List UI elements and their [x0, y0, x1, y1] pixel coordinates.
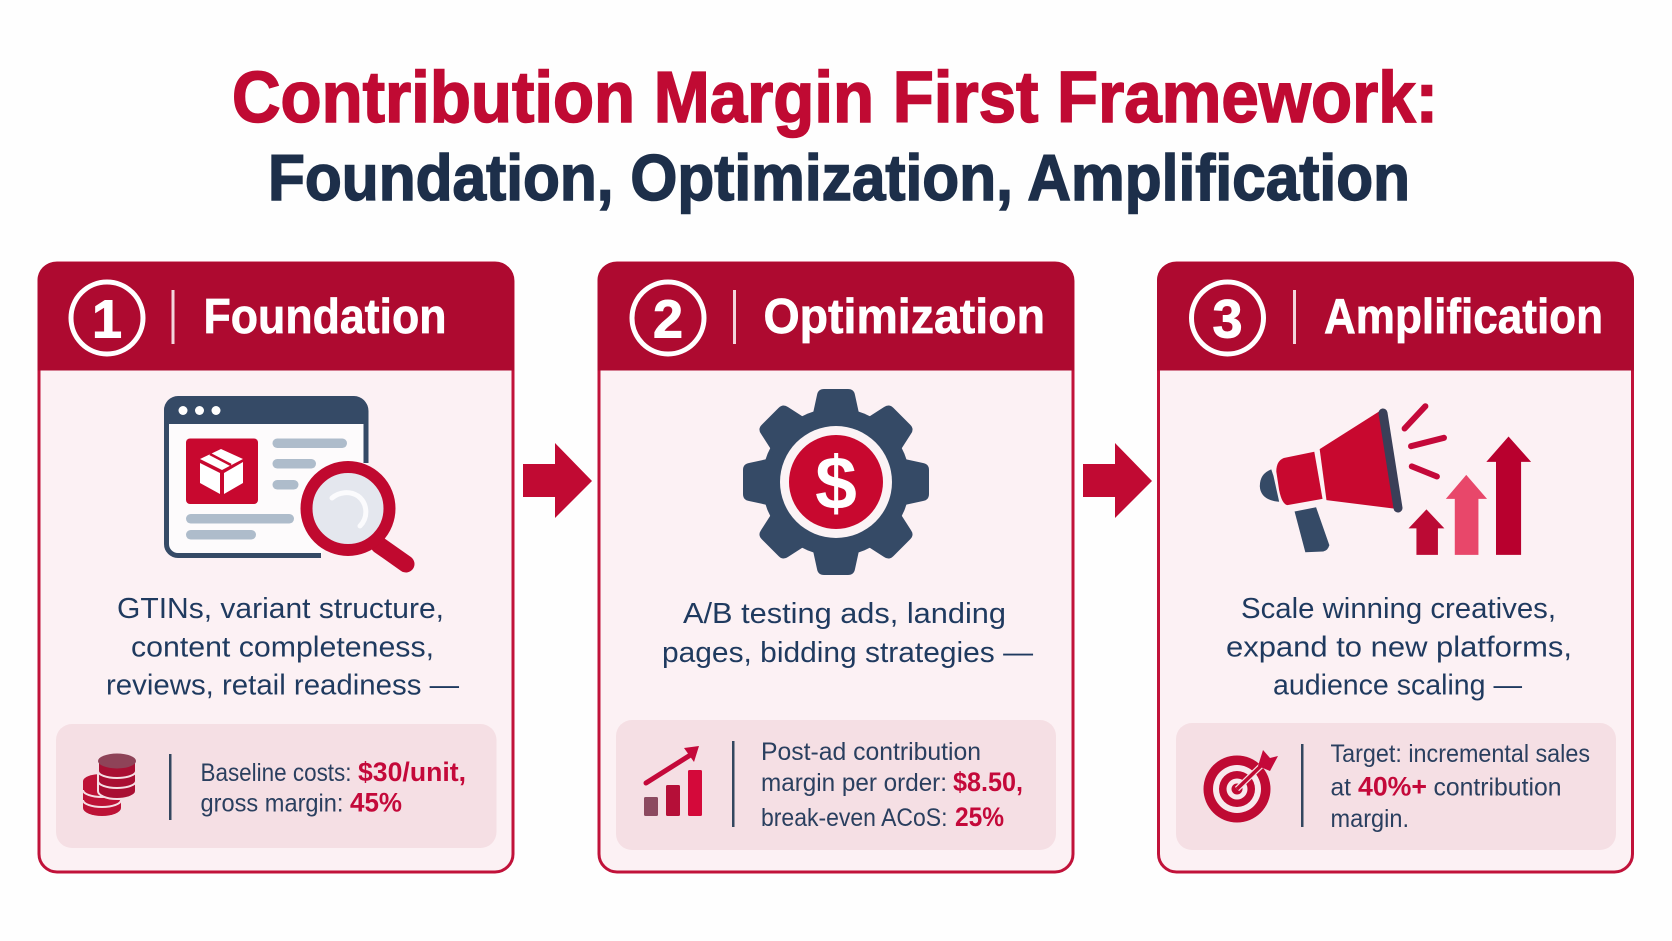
- description text: [662, 598, 1033, 669]
- stat box: [616, 720, 1056, 850]
- description text: [1226, 593, 1572, 702]
- stat text: 45%: [350, 788, 402, 818]
- header band: 3: [1212, 290, 1243, 350]
- stat text: break-even ACoS:: [761, 804, 948, 832]
- stat box: [1176, 723, 1616, 850]
- panel frame: [1158, 263, 1632, 872]
- header band: [598, 262, 1074, 370]
- description text: A/B testing ads, landing: [683, 598, 1006, 630]
- panel: amplification: [1157, 262, 1634, 872]
- stat text: contribution: [1434, 774, 1562, 802]
- icon: target with arrow: [1204, 750, 1278, 822]
- header band: Amplification: [1324, 290, 1603, 344]
- description text: expand to new platforms,: [1226, 632, 1572, 664]
- title: Contribution Margin First Framework:: [232, 58, 1438, 138]
- icon: coins: [83, 754, 136, 816]
- icon: gear with dollar: [743, 389, 929, 575]
- stat text: margin per order:: [761, 769, 947, 797]
- panel frame: [39, 263, 513, 872]
- header band: [38, 262, 514, 370]
- stat text: $30/unit,: [358, 757, 466, 787]
- stat text: 25%: [955, 802, 1004, 832]
- stat text: [200, 757, 466, 818]
- stat text: 40%+: [1358, 772, 1427, 802]
- title: [232, 58, 1438, 214]
- stat text: margin.: [1330, 805, 1409, 833]
- panel: optimization: [598, 262, 1074, 872]
- description text: content completeness,: [131, 632, 434, 664]
- stat text: Post-ad contribution: [761, 738, 981, 766]
- stat text: gross margin:: [200, 790, 344, 818]
- description text: reviews, retail readiness —: [106, 670, 459, 702]
- arrow: foundation to optimization: [523, 443, 592, 518]
- stat text: at: [1330, 774, 1351, 802]
- icon: product page under magnifying glass: [164, 396, 406, 564]
- stat box: [56, 724, 496, 848]
- description text: audience scaling —: [1273, 670, 1522, 702]
- header band: 1: [92, 290, 122, 350]
- header band: [1157, 262, 1634, 370]
- stat text: Baseline costs:: [200, 759, 352, 787]
- header band: Foundation: [204, 290, 446, 344]
- stat text: [761, 738, 1023, 832]
- icon: rising bar chart: [644, 746, 702, 816]
- panel frame: [599, 263, 1073, 872]
- stat text: $8.50,: [953, 767, 1023, 797]
- description text: [106, 593, 459, 702]
- header band: 2: [653, 290, 683, 350]
- arrow: optimization to amplification: [1083, 443, 1152, 518]
- description text: pages, bidding strategies —: [662, 637, 1033, 669]
- title: Foundation, Optimization, Amplification: [268, 141, 1410, 214]
- stat text: [1330, 740, 1590, 833]
- icon: gear with dollar: $: [815, 441, 857, 525]
- stat text: Target: incremental sales: [1330, 740, 1590, 768]
- description text: Scale winning creatives,: [1241, 593, 1556, 625]
- icon: megaphone with rising arrows: [1260, 406, 1531, 555]
- panel: foundation: [38, 262, 514, 872]
- description text: GTINs, variant structure,: [117, 593, 444, 625]
- header band: Optimization: [764, 290, 1045, 344]
